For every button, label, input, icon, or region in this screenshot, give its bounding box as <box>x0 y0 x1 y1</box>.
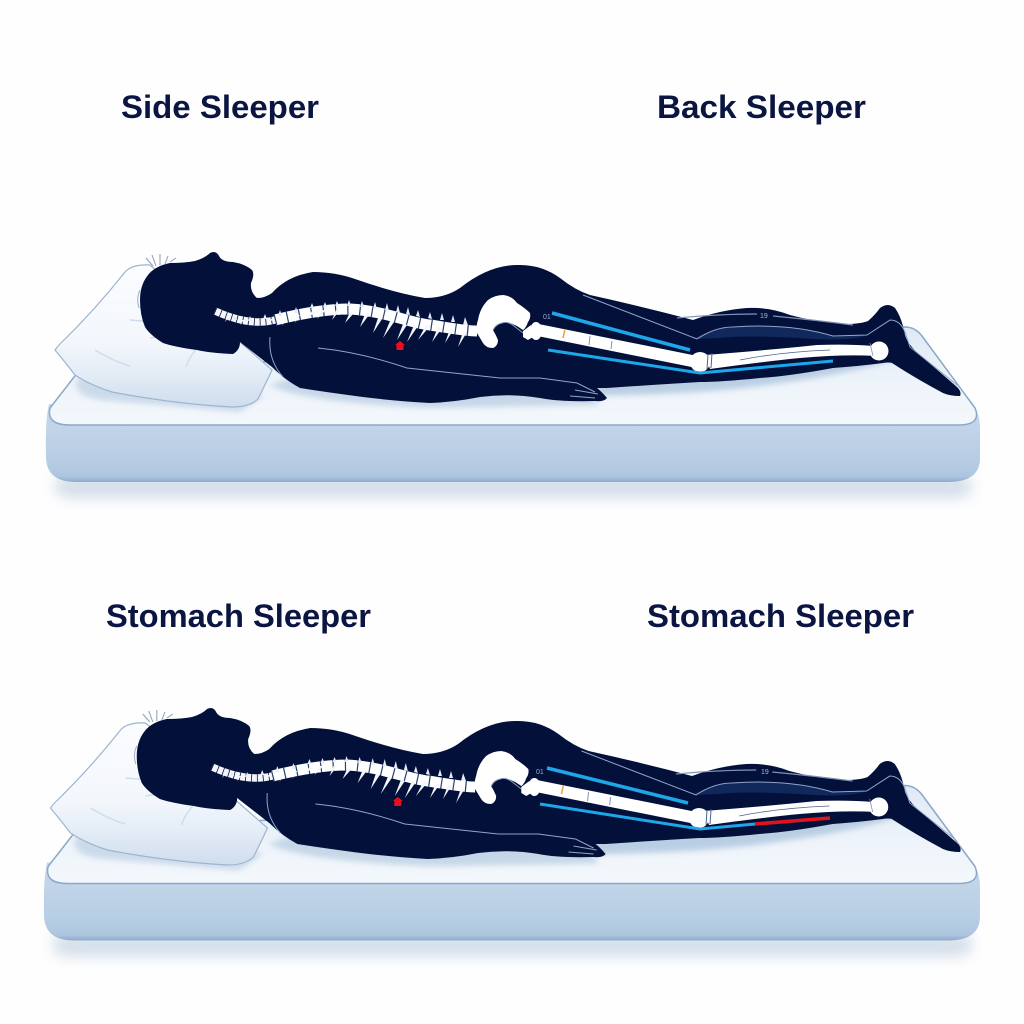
heading: side sleeper: Side Sleeper <box>121 89 319 125</box>
panel: lower sleeper on mattress <box>44 708 980 956</box>
small leg labels: 19 <box>761 769 769 776</box>
heading: back sleeper: Back Sleeper <box>657 89 866 125</box>
lower blue alignment line <box>540 804 755 829</box>
heading: stomach sleeper left: Stomach Sleeper <box>106 598 371 634</box>
red pressure line <box>755 818 830 824</box>
pillow <box>55 265 272 407</box>
heading: stomach sleeper right: Stomach Sleeper <box>647 598 914 634</box>
panel: upper sleeper on mattress <box>46 252 980 498</box>
upper blue alignment line <box>552 313 690 350</box>
small leg labels <box>543 313 768 321</box>
lower blue alignment line <box>548 350 833 373</box>
small leg labels: 01 <box>536 769 544 776</box>
small leg labels: 19 <box>760 313 768 320</box>
small leg labels <box>536 769 769 776</box>
mattress <box>44 786 980 956</box>
body silhouette <box>134 708 961 859</box>
body silhouette <box>138 252 961 403</box>
skeleton: spine, pelvis and leg bones <box>215 295 888 372</box>
skeleton: spine, pelvis and leg bones <box>212 751 888 828</box>
small leg labels: 01 <box>543 314 551 321</box>
mattress <box>46 327 980 498</box>
pillow <box>50 723 268 865</box>
upper blue alignment line <box>547 768 688 803</box>
